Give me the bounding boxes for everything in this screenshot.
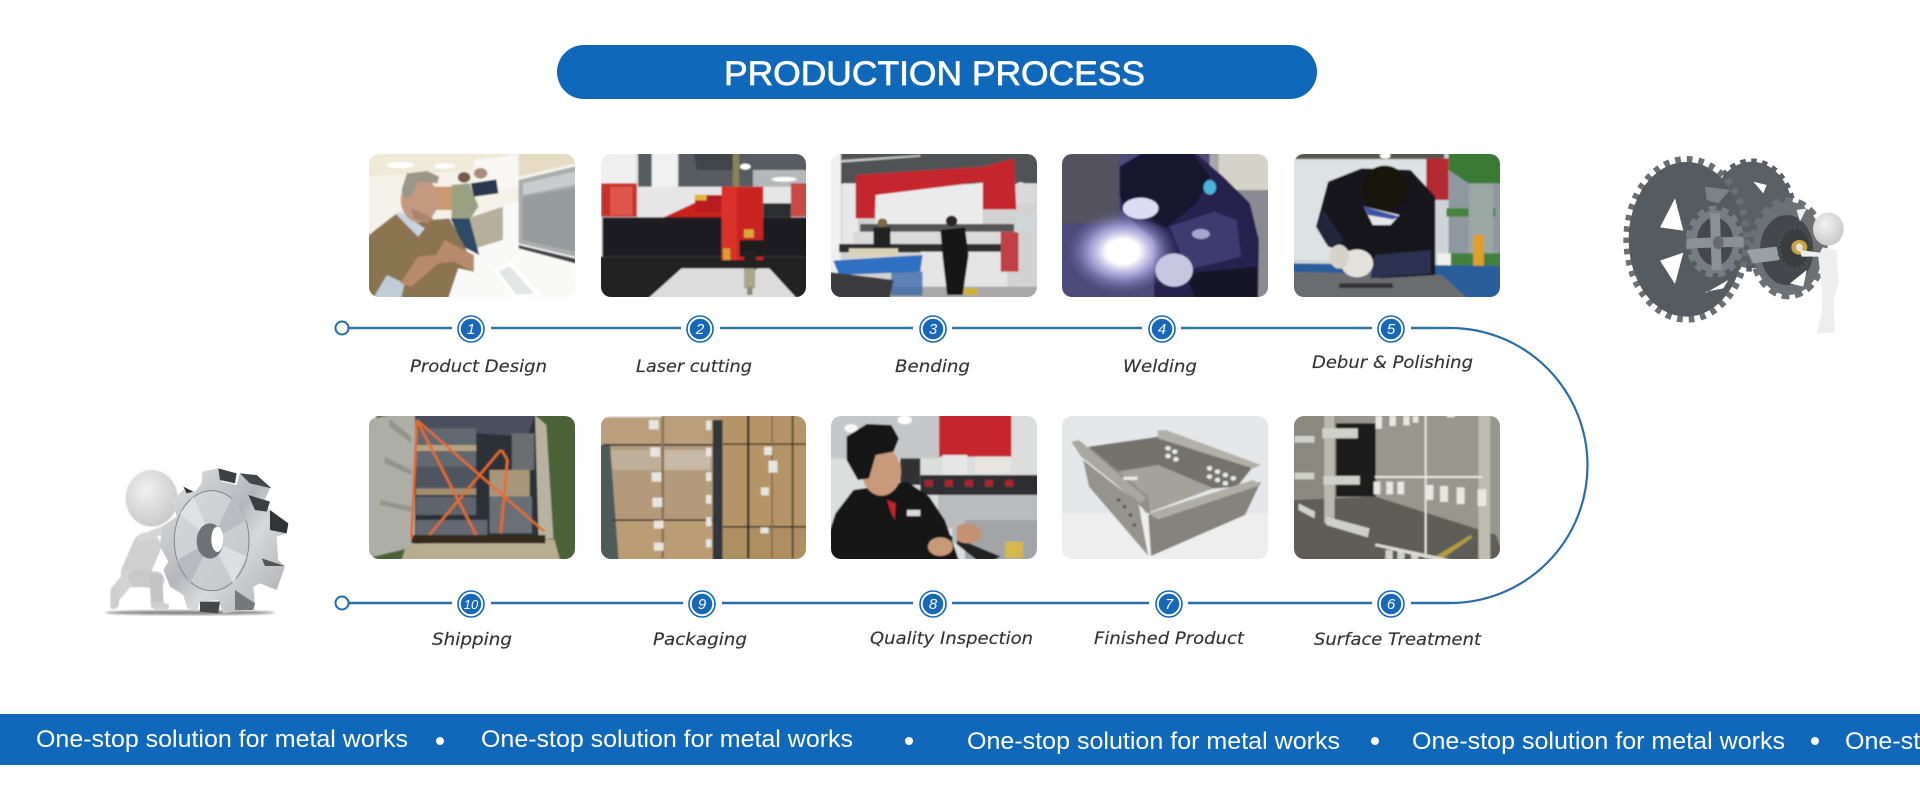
photo: shipping [369,416,575,559]
badge 4: 4 [1158,321,1166,338]
badge 7: 7 [1165,596,1174,613]
label: shipping: Shipping [432,630,512,650]
label: bending: Bending [895,357,970,377]
progress line: steps 6 to 10 [336,596,1450,610]
photo: bending [831,154,1037,297]
photo: product design [369,154,575,297]
badge 10: 10 [464,597,479,612]
badge 8 [920,591,946,617]
badge 8: 8 [929,596,938,613]
badge 1: 1 [467,321,475,338]
badge 7 [1156,591,1182,617]
footer banner: One-stop solution for metal works [36,726,408,753]
footer banner: One-stop solution for metal works [1412,728,1785,755]
badge 2: 2 [695,321,705,338]
title: PRODUCTION PROCESS [724,55,1145,93]
photo: quality inspection [831,416,1037,559]
badge 1 [458,316,484,342]
badge 9: 9 [698,596,707,613]
photo: debur and polishing [1294,154,1500,297]
badge 6 [1378,591,1404,617]
label: laser cutting: Laser cutting [636,357,752,377]
icon: figure pushing gear [105,468,288,615]
badge 3: 3 [929,321,938,338]
photo: surface treatment [1294,416,1500,559]
title [557,45,1317,99]
footer banner: One-stop solution for metal works [967,728,1340,755]
badge 2 [687,316,713,342]
label: surface treatment: Surface Treatment [1314,630,1482,650]
badge 3 [920,316,946,342]
progress line: steps 1 to 5 [336,322,1450,334]
label: quality inspection: Quality Inspection [870,629,1033,649]
badge 10 [458,591,484,617]
footer banner [0,714,1920,765]
badge 4 [1149,316,1175,342]
label: packaging: Packaging [653,630,747,650]
photo: welding [1062,154,1268,297]
photo: finished product [1062,416,1268,559]
label: finished product: Finished Product [1094,629,1245,649]
label: product design: Product Design [410,357,547,377]
badge 5 [1378,316,1404,342]
photo: packaging [601,416,806,559]
label: debur and polishing: Debur & Polishing [1312,353,1473,373]
label: welding: Welding [1123,357,1197,377]
badge 6: 6 [1387,596,1396,613]
badge 5: 5 [1387,321,1396,338]
photo: laser cutting [601,154,806,297]
icon: figure with machine gears [1629,162,1844,333]
footer banner: One-stop solution for metal works [481,726,853,753]
badge 9 [689,591,715,617]
curved connector [1450,328,1588,603]
